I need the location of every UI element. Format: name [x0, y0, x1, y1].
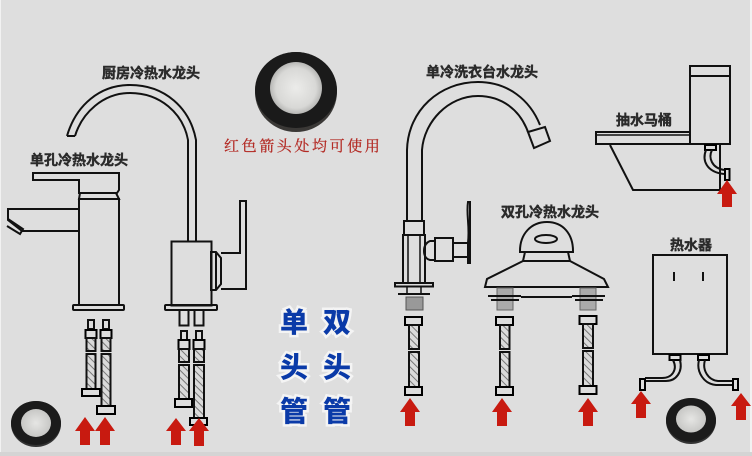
- heading: toilet: 抽水马桶: [616, 112, 672, 128]
- icon: gasket bottom right: [666, 398, 716, 444]
- hose: double head long: [190, 331, 207, 425]
- laundry faucet: [395, 82, 550, 310]
- connectors: kitchen faucet plugs: [180, 310, 204, 326]
- red arrows: single head: [75, 417, 115, 445]
- heading: kitchen faucet: 厨房冷热水龙头: [102, 65, 200, 81]
- kitchen faucet: [67, 85, 246, 310]
- blue labels: single and double head hose: 单: [280, 307, 308, 338]
- blue labels: single and double head hose: [280, 307, 351, 427]
- icon: gasket bottom left: [11, 401, 61, 447]
- single-hole faucet: [7, 173, 124, 310]
- heading: laundry faucet: 单冷洗衣台水龙头: [426, 64, 538, 80]
- blue labels: single and double head hose: 管: [280, 395, 308, 427]
- heading: single-hole faucet: 单孔冷热水龙头: [30, 152, 128, 168]
- hose: double head short: [175, 331, 192, 407]
- hose: laundry faucet: [405, 317, 422, 395]
- blue labels: single and double head hose: 头: [323, 352, 351, 383]
- icon: gasket top: [255, 52, 337, 132]
- heading: water heater: 热水器: [670, 237, 712, 253]
- hose: single head long: [97, 320, 115, 414]
- red arrow: toilet: [717, 180, 737, 207]
- hose: double-hole left: [496, 317, 513, 395]
- caption: red note: 红色箭头处均可使用: [224, 138, 382, 155]
- hose: double-hole right: [580, 316, 596, 394]
- blue labels: single and double head hose: 头: [280, 352, 308, 383]
- red arrows: faucets right: [400, 398, 598, 426]
- blue labels: single and double head hose: 双: [323, 307, 351, 338]
- double-hole faucet: [485, 222, 608, 310]
- red arrows: water heater: [631, 391, 751, 420]
- toilet: [596, 66, 730, 190]
- heading: double-hole faucet: 双孔冷热水龙头: [501, 204, 599, 220]
- water heater: [640, 255, 738, 390]
- red arrows: double head: [166, 418, 209, 446]
- hose: single head short: [82, 320, 100, 396]
- blue labels: single and double head hose: 管: [323, 395, 351, 427]
